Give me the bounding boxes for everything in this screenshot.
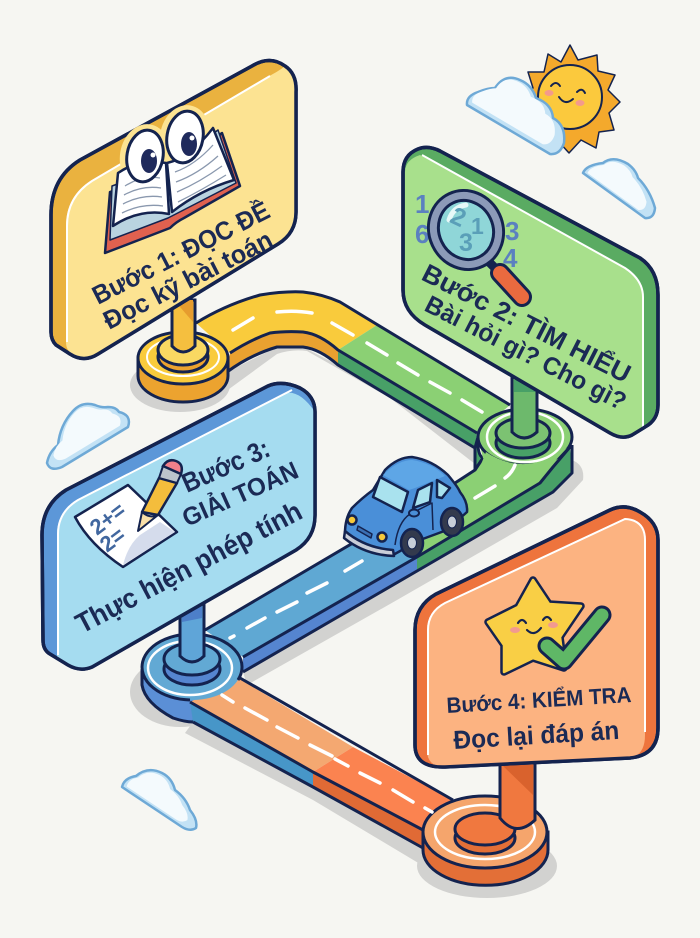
road: green and blue segment from step 2 to step 3 [205,437,572,672]
door line and mirror [395,503,433,545]
road side: green [338,350,477,448]
numbers around the glass: 4 [503,243,518,273]
car bumper [344,531,394,556]
icon: magnifying glass over numbers [415,178,522,297]
star fill [488,580,581,672]
sign 4 board face [427,518,645,767]
rear side window [437,480,450,498]
base 3 side [142,670,242,722]
sun face [551,83,585,102]
road centre dashes [222,311,515,812]
road side: blue [190,702,313,787]
paper [75,485,177,567]
icon: paper and pencil [75,460,182,567]
road surface: yellow [196,292,377,353]
rear wheel [441,508,463,536]
road side: blue [243,557,417,672]
sign 1 description: Đọc kỹ bài toán [98,224,277,335]
page lines [122,145,226,213]
sign 3 description: Thực hiện phép tính [70,495,307,639]
numbers around the glass [415,189,519,273]
sign 4: orange [415,507,658,767]
base: step 3 [142,600,242,700]
icon: smiling star with check mark [488,580,602,672]
road: orange segment from step 3 to step 4 [142,670,453,848]
grille [357,526,372,538]
sign 3 heading line 2: GIẢI TOÁN [177,455,303,532]
pencil eraser [163,460,182,474]
pencil tip [138,512,158,531]
road surface: dark orange [313,747,453,830]
post [500,755,535,829]
road outlines [196,292,510,448]
sign 1 board face [66,66,296,358]
sign 2 description: Bài hỏi gì? Cho gì? [420,290,631,416]
sign 4 heading: Bước 4: KIỂM TRA [446,682,632,718]
sign 2 board edge [403,147,658,437]
handle [489,262,500,273]
check mark [547,615,602,661]
sign 1: yellow [51,60,296,358]
road side: yellow [227,332,338,372]
icon: blue car [344,457,467,557]
book cover [105,133,240,253]
base: step 1 [138,300,228,402]
sign 4 board edge [415,507,658,767]
numbers in the lens: 2 [446,202,470,233]
front side window [413,483,432,508]
icon: large cloud [467,78,564,154]
road outlines [190,678,453,848]
icon: magnifying glass over numbers: 1 [471,213,484,239]
pupils [141,149,157,173]
base: step 2 [478,375,572,500]
sign 3 board edge [42,383,315,669]
post [172,300,195,352]
sign 3 heading line 1: Bước 3: [177,433,274,498]
icon: cloud left [47,404,129,469]
left page [113,162,169,226]
sign 1 heading: Bước 1: ĐỌC ĐỀ [87,195,274,310]
sign 2 heading: Bước 2: TÌM HIỂU [417,258,636,389]
icon: open book with eyes [105,101,240,253]
pencil ferrule [159,466,181,483]
road surface: green [385,437,570,557]
star cheeks [510,627,520,633]
paper sums: 2+= [85,497,130,540]
sun disc [538,65,602,129]
numbers around the glass: 1 [415,189,429,219]
icon: paper and pencil: 2= [95,522,130,557]
base: step 4 [423,755,548,885]
road: yellow and green segment from step 1 to step 2 [196,292,510,448]
road surface: green [338,325,510,433]
road surface: blue [205,524,417,657]
base 2 side piece [475,437,483,470]
car body [345,457,467,555]
eye halos [115,120,175,192]
right page [167,128,234,212]
ground shadows [130,347,583,898]
sign 2 board face [405,155,643,437]
sign 1 board edge [51,60,296,358]
post [512,375,537,438]
road side: green [417,447,572,571]
icon: cloud bottom [122,770,196,830]
icon: magnifying glass over numbers: 3 [459,229,473,257]
pencil body [142,478,177,515]
road surface: light orange [190,678,353,772]
left eye [123,127,167,185]
windshield [373,477,408,512]
roof highlight [383,460,445,490]
book page block [110,130,236,240]
right eye [163,108,207,166]
lens glass [429,191,503,269]
road outlines [205,445,572,672]
road side: orange [313,772,423,848]
star outline [488,580,581,672]
sun rays [522,45,620,153]
headlights [348,516,356,524]
numbers around the glass: 3 [505,216,519,246]
icon: sun [522,45,620,153]
sign 3: blue [42,383,315,669]
lens rim [416,178,516,282]
post [180,600,204,662]
sign 2: green [403,147,658,437]
front wheel [401,529,423,557]
sign 4 description: Đọc lại đáp án [453,715,620,755]
icon: small cloud top right [583,159,655,218]
sign 3 board face [57,393,315,669]
seam patch [478,448,567,500]
numbers around the glass: 6 [415,219,429,249]
